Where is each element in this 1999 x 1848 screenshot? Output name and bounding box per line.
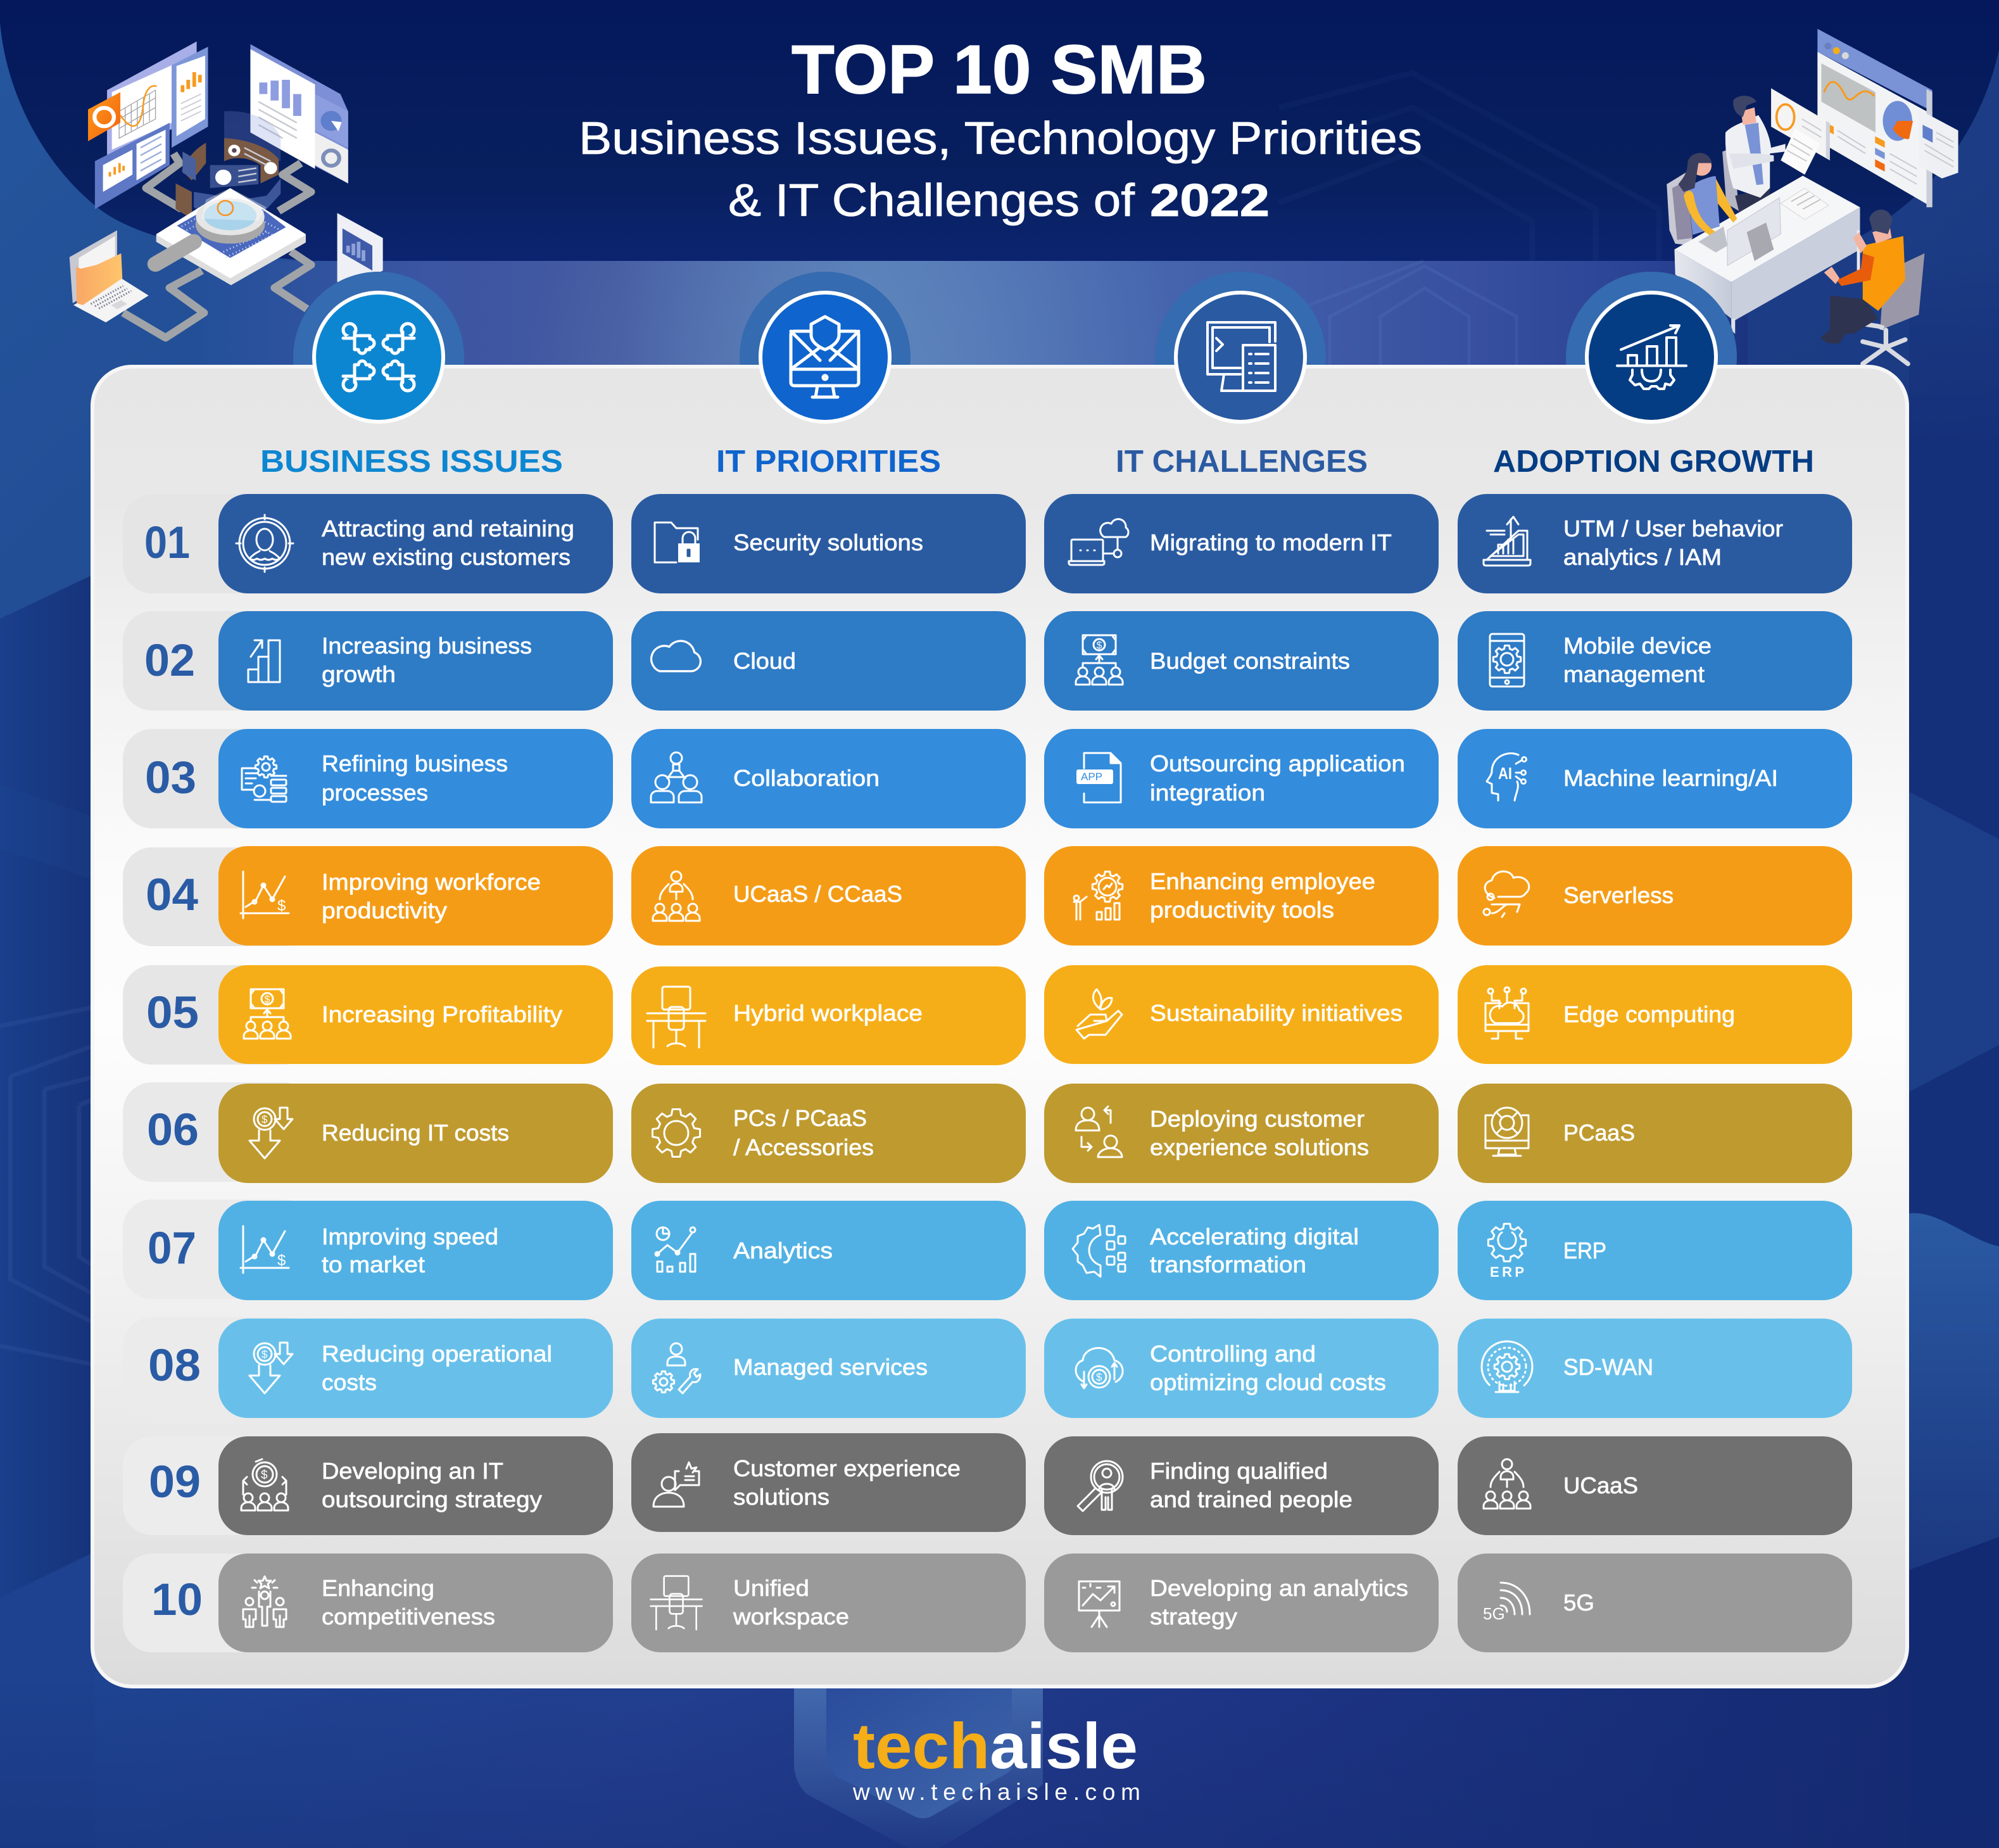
text: Analytics: [733, 1237, 833, 1263]
row 6: PCs / PCaaS / Accessories: [631, 1084, 1026, 1183]
text: Improving workforce: [322, 869, 541, 895]
text: Managed services: [733, 1354, 928, 1380]
text: Budget constraints: [1150, 648, 1350, 674]
text: solutions: [733, 1484, 829, 1510]
text: processes: [322, 780, 428, 806]
column icon: growth chart and gear: [1587, 293, 1716, 422]
icon: money and people: $: [1097, 640, 1102, 651]
rank 05: [123, 965, 313, 1065]
row 5: Sustainability initiatives: [1044, 965, 1439, 1064]
row 10: 5G: [1458, 1554, 1852, 1652]
text: Increasing Profitability: [322, 1001, 562, 1027]
heading: BUSINESS ISSUES: BUSINESS ISSUES: [260, 445, 563, 479]
icon: cloud coin: $: [1096, 1371, 1102, 1383]
text: Deploying customer: [1150, 1106, 1365, 1132]
icon: hybrid desk: [647, 987, 705, 1047]
row 1: Migrating to modern IT: [1044, 494, 1439, 593]
icon: coin and down arrows: $: [262, 1348, 268, 1360]
icon: outsourcing coin: $: [261, 1469, 268, 1482]
icon: customer target: [236, 515, 293, 572]
rank 01: [123, 494, 313, 593]
main panel: [92, 367, 1907, 1687]
rank 02: [123, 611, 313, 711]
row 8: SD-WAN: [1458, 1319, 1852, 1418]
icon: AI head: [1487, 754, 1526, 801]
title: [579, 31, 1422, 226]
text: Reducing IT costs: [322, 1120, 509, 1146]
text: [1150, 1341, 1386, 1395]
text: Improving speed: [322, 1224, 498, 1250]
row 5: Increasing Profitability: [218, 965, 613, 1064]
text: [322, 633, 532, 687]
icon: folder lock: [655, 522, 700, 562]
row 3: Outsourcing application integration: [1044, 729, 1439, 828]
rank 06: 06: [147, 1105, 199, 1155]
text: 5G: [1563, 1590, 1594, 1616]
row 2: Increasing business growth: [218, 611, 613, 711]
text: UCaaS: [1563, 1472, 1638, 1498]
icon: 5G signal: 5G: [1483, 1604, 1505, 1623]
icon: magnify person: [1078, 1461, 1123, 1511]
row 4: Serverless: [1458, 846, 1852, 946]
text: strategy: [1150, 1604, 1237, 1630]
icon: laptop chart: [1484, 517, 1530, 566]
icon: team star: [243, 1576, 286, 1627]
icon: org people: [653, 871, 700, 921]
icon: employee productivity: [1074, 871, 1123, 920]
text: optimizing cloud costs: [1150, 1369, 1386, 1395]
text: Developing an IT: [322, 1458, 503, 1484]
heading: IT PRIORITIES: IT PRIORITIES: [716, 445, 941, 479]
logo: techaisle: techaisle: [853, 1710, 1138, 1782]
icon: chart dollar: $: [277, 897, 286, 915]
text: Controlling and: [1150, 1341, 1316, 1367]
rank 09: [123, 1436, 313, 1535]
row 6: Reducing IT costs: [218, 1084, 613, 1183]
icon: cloud: [652, 641, 700, 671]
icon: app file: APP: [1081, 771, 1102, 783]
text: to market: [322, 1251, 425, 1277]
text: [322, 1224, 498, 1277]
icon: presentation chart: [1079, 1581, 1119, 1627]
icon: workspace desk: [651, 1576, 702, 1630]
text: [322, 750, 508, 806]
text: Finding qualified: [1150, 1458, 1328, 1484]
text: Enhancing: [322, 1575, 434, 1601]
icon: laptop to cloud: [1069, 519, 1128, 565]
text: [322, 869, 541, 923]
icon: coin and down arrows: $: [262, 1113, 268, 1125]
row 4: Enhancing employee productivity tools: [1044, 846, 1439, 946]
icon: customer chat: [653, 1462, 699, 1507]
text: Collaboration: [733, 765, 880, 791]
icon: chart dollar: [241, 871, 289, 918]
row 3: Refining business processes: [218, 729, 613, 828]
text: [1150, 1575, 1408, 1630]
rank 07: [123, 1199, 313, 1299]
icon: cloud nodes: [1484, 871, 1529, 917]
text: Developing an analytics: [1150, 1575, 1408, 1601]
rank 08: 08: [148, 1341, 201, 1391]
text: Cloud: [733, 648, 796, 674]
text: Increasing business: [322, 633, 532, 659]
text: [1563, 516, 1783, 570]
row 8: Managed services: [631, 1319, 1026, 1418]
rank 04: 04: [146, 870, 199, 920]
row 7: Analytics: [631, 1201, 1026, 1300]
text: ERP: [1563, 1237, 1606, 1263]
text: outsourcing strategy: [322, 1486, 542, 1512]
text: SD-WAN: [1563, 1354, 1653, 1380]
text: [733, 1455, 961, 1510]
text: competitiveness: [322, 1604, 495, 1630]
rank 07: 07: [148, 1224, 196, 1274]
row 9: Developing an IT outsourcing strategy: [218, 1436, 613, 1535]
heading: IT CHALLENGES: IT CHALLENGES: [1116, 445, 1368, 479]
icon: digital gear: [1073, 1225, 1125, 1277]
row 2: Cloud: [631, 611, 1026, 711]
icon: person gear wrench: [653, 1343, 700, 1393]
text: PCs / PCaaS: [733, 1105, 867, 1131]
row 6: Deploying customer experience solutions: [1044, 1084, 1439, 1183]
title: TOP 10 SMB: [791, 31, 1207, 108]
text: [322, 516, 574, 570]
rank 09: 09: [149, 1457, 201, 1507]
icon: app file: [1076, 753, 1121, 802]
text: growth: [322, 661, 396, 687]
text: Mobile device: [1563, 633, 1712, 659]
title: 2022: [1150, 175, 1270, 226]
icon: money and people: $: [265, 994, 270, 1005]
text: Migrating to modern IT: [1150, 529, 1392, 555]
row 1: Attracting and retaining new existing customers: [218, 494, 613, 593]
icon: chart dollar: $: [277, 1252, 286, 1269]
rank 03: 03: [145, 753, 196, 803]
row 9: Finding qualified and trained people: [1044, 1436, 1439, 1535]
text: [1150, 750, 1405, 806]
icon: ERP gear: ERP: [1490, 1264, 1524, 1280]
text: Reducing operational: [322, 1341, 552, 1367]
rank 01: 01: [144, 518, 190, 568]
icon: chart dollar: [241, 1226, 289, 1273]
text: Serverless: [1563, 882, 1674, 908]
row 10: Enhancing competitiveness: [218, 1554, 613, 1652]
text: workspace: [733, 1604, 849, 1630]
text: costs: [322, 1369, 377, 1395]
row 5: Hybrid workplace: [631, 966, 1026, 1065]
icon: org people: [1484, 1459, 1530, 1509]
rank 10: 10: [151, 1575, 203, 1625]
text: UCaaS / CCaaS: [733, 881, 902, 907]
illustration: team at desk isometric: [1667, 28, 1958, 364]
icon: 5G signal: [1483, 1583, 1530, 1623]
text: Machine learning/AI: [1563, 765, 1778, 791]
column icon: secure monitor: [760, 293, 890, 422]
row 3: Machine learning/AI: [1458, 729, 1852, 828]
text: [322, 1458, 542, 1512]
icon: analytics: [655, 1227, 695, 1272]
text: [322, 1341, 552, 1395]
icon: money and people: [244, 989, 291, 1039]
text: new existing customers: [322, 544, 571, 570]
row 9: Customer experience solutions: [631, 1433, 1026, 1532]
rank 06: [123, 1082, 313, 1182]
website url: www.techaisle.com: [852, 1779, 1140, 1805]
icon: cloud on screen: [1485, 987, 1529, 1039]
icon: growth bars: [248, 640, 280, 682]
text: Enhancing employee: [1150, 868, 1375, 894]
icon: phone gear: [1490, 634, 1524, 687]
row 7: Accelerating digital transformation: [1044, 1201, 1439, 1300]
text: Sustainability initiatives: [1150, 1000, 1403, 1026]
text: / Accessories: [733, 1134, 874, 1160]
icon: gear: [652, 1109, 700, 1157]
rank 02: 02: [144, 636, 195, 686]
icon: coin and down arrows: [249, 1343, 293, 1393]
text: [733, 1105, 874, 1160]
row 7: ERP: [1458, 1201, 1852, 1300]
text: Refining business: [322, 750, 508, 776]
icon: network bulb gear: [1471, 1331, 1543, 1403]
text: Accelerating digital: [1150, 1224, 1359, 1250]
icon: money and people: [1076, 635, 1123, 685]
row 1: Security solutions: [631, 494, 1026, 593]
icon: monitor lifebuoy: [1485, 1108, 1529, 1156]
column icon: monitor and documents: [1176, 293, 1305, 422]
halos behind column icons: [293, 272, 1737, 443]
row 8: Reducing operational costs: [218, 1319, 613, 1418]
row 6: PCaaS: [1458, 1084, 1852, 1183]
text: [1150, 1458, 1353, 1512]
text: Unified: [733, 1575, 809, 1601]
text: PCaaS: [1563, 1120, 1635, 1146]
text: experience solutions: [1150, 1134, 1369, 1160]
row 10: Developing an analytics strategy: [1044, 1554, 1439, 1652]
rank 04: [123, 847, 313, 946]
icon: AI head: AI: [1498, 764, 1512, 783]
text: [1563, 633, 1712, 687]
icon: ERP gear: [1488, 1224, 1526, 1280]
heading: ADOPTION GROWTH: ADOPTION GROWTH: [1493, 445, 1814, 479]
icon: team and bulb: [651, 752, 702, 802]
row 3: Collaboration: [631, 729, 1026, 828]
icon: process document gear: [242, 756, 286, 802]
text: Attracting and retaining: [322, 516, 574, 541]
row 10: Unified workspace: [631, 1554, 1026, 1652]
icon: cloud coin: [1076, 1348, 1123, 1388]
rank 10: [123, 1554, 313, 1652]
text: productivity tools: [1150, 897, 1334, 923]
text: [322, 1575, 495, 1630]
icon: hand and plant: [1076, 989, 1122, 1039]
text: productivity: [322, 897, 447, 923]
text: analytics / IAM: [1563, 544, 1722, 570]
text: [1150, 1224, 1359, 1277]
row 8: Controlling and optimizing cloud costs: [1044, 1319, 1439, 1418]
title: Business Issues, Technology Priorities: [579, 113, 1422, 164]
text: and trained people: [1150, 1486, 1353, 1512]
text: UTM / User behavior: [1563, 516, 1783, 541]
row 4: UCaaS / CCaaS: [631, 846, 1026, 946]
row 5: Edge computing: [1458, 965, 1852, 1064]
row 4: Improving workforce productivity: [218, 846, 613, 946]
row 1: UTM / User behavior analytics / IAM: [1458, 494, 1852, 593]
row 2: Budget constraints: [1044, 611, 1439, 711]
text: Edge computing: [1563, 1001, 1735, 1027]
icon: customers swap: [1076, 1106, 1122, 1157]
icon: outsourcing coin: [241, 1459, 288, 1510]
rank 08: [123, 1317, 313, 1417]
text: management: [1563, 661, 1705, 687]
icon: coin and down arrows: [249, 1108, 293, 1158]
row 7: Improving speed to market: [218, 1201, 613, 1300]
illustration: data analytics isometric: [70, 41, 383, 338]
column icon: puzzle: [314, 293, 443, 422]
text: [733, 1575, 849, 1630]
text: transformation: [1150, 1251, 1306, 1277]
text: Outsourcing application: [1150, 750, 1405, 776]
text: Security solutions: [733, 529, 923, 555]
text: Hybrid workplace: [733, 1000, 923, 1026]
row 9: UCaaS: [1458, 1436, 1852, 1535]
row 2: Mobile device management: [1458, 611, 1852, 711]
text: [1150, 868, 1375, 923]
text: [1150, 1106, 1369, 1160]
rank 05: 05: [146, 988, 199, 1038]
rank 03: [123, 729, 313, 828]
text: Customer experience: [733, 1455, 961, 1481]
text: integration: [1150, 780, 1265, 806]
title: & IT Challenges of: [728, 175, 1135, 226]
